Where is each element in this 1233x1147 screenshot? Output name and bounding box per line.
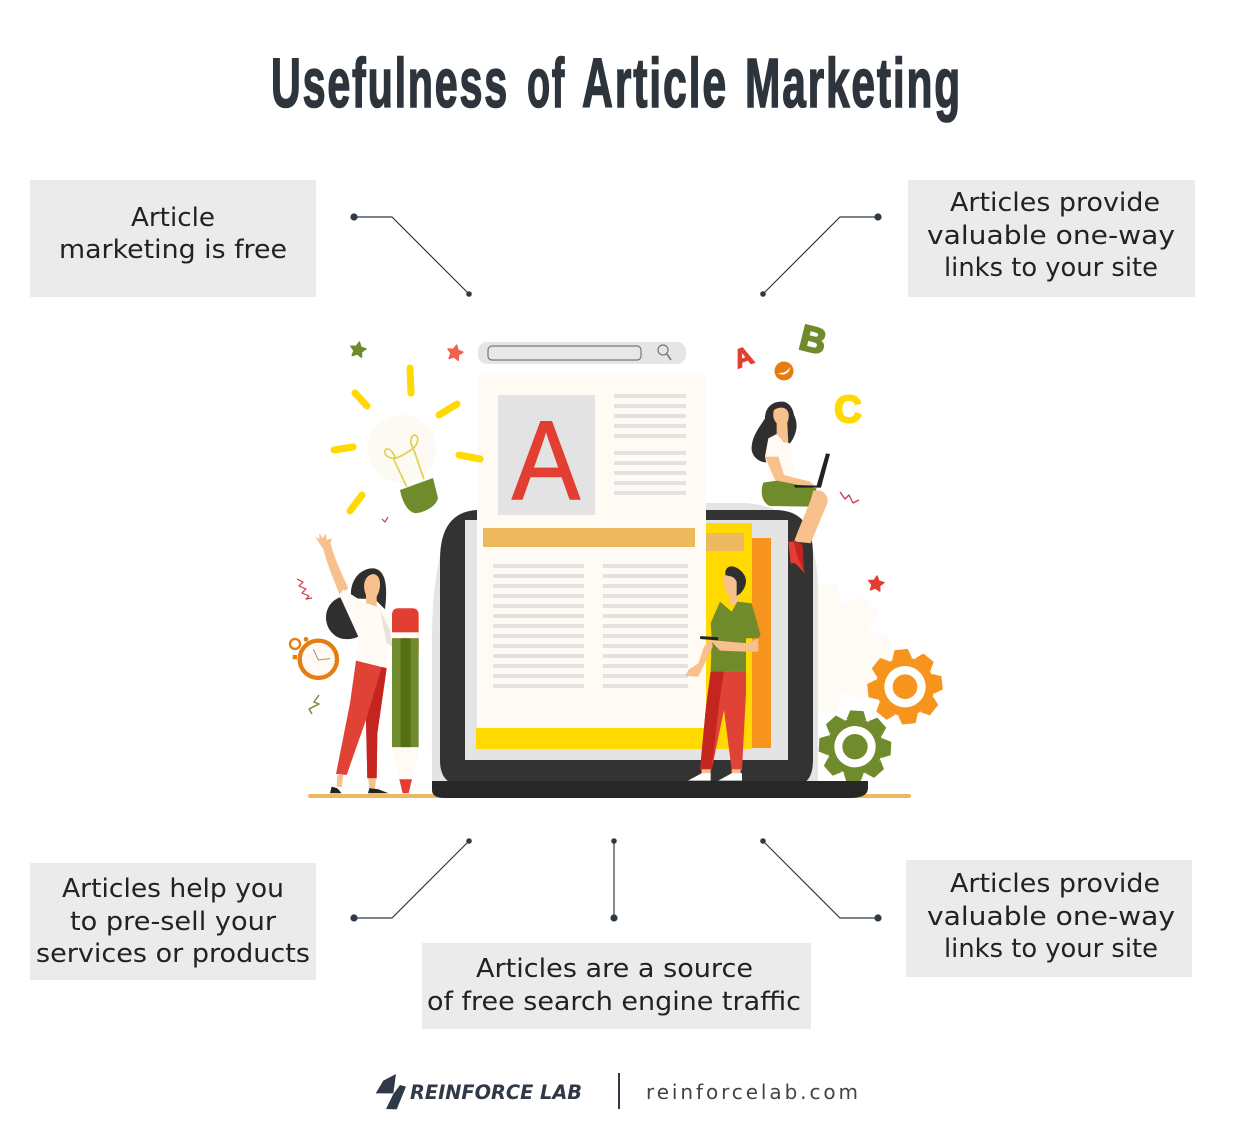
callout: one-way links bottom right xyxy=(906,860,1192,977)
callout: search engine traffic: Articles are a source xyxy=(476,954,753,984)
letters A B C: C xyxy=(834,389,862,431)
letters A B C: A xyxy=(729,340,758,374)
title: Article xyxy=(582,44,728,122)
callout: one-way links bottom right: links to your site xyxy=(944,934,1158,964)
yellow panel xyxy=(700,523,752,749)
ghost gear xyxy=(775,584,889,712)
callout: article marketing is free xyxy=(30,180,316,297)
callout: one-way links bottom right: Articles provide xyxy=(950,869,1160,899)
callout: one-way links top right: Articles provide xyxy=(950,188,1160,218)
callout: search engine traffic xyxy=(422,943,811,1029)
laptop screen xyxy=(465,520,788,760)
icon: green gear xyxy=(817,709,893,785)
orange panel xyxy=(752,538,771,748)
icon: light bulb xyxy=(334,368,480,513)
callout: search engine traffic: of free search engine traffic xyxy=(427,987,801,1017)
title: Marketing xyxy=(745,44,962,122)
callout: article marketing is free: Article xyxy=(131,203,215,233)
search bar xyxy=(478,342,686,364)
article page xyxy=(477,375,706,749)
title xyxy=(271,44,962,122)
callout: pre-sell: services or products xyxy=(36,939,310,969)
yellow footer band xyxy=(476,728,706,749)
logo icon xyxy=(376,1074,406,1109)
callout: one-way links top right: valuable one-way xyxy=(927,221,1175,251)
callout: one-way links bottom right: valuable one-way xyxy=(927,902,1175,932)
small tan bar xyxy=(700,533,744,551)
footer divider xyxy=(618,1073,620,1109)
letters A B C: B xyxy=(796,316,831,363)
woman with pencil xyxy=(315,533,393,793)
letter tile: A xyxy=(512,398,580,523)
laptop body xyxy=(440,510,813,785)
letters A B C xyxy=(729,316,862,431)
callout: one-way links top right: links to your site xyxy=(944,253,1158,283)
logo xyxy=(376,1073,858,1109)
tan heading bar xyxy=(483,528,695,547)
callout: one-way links top right xyxy=(908,180,1195,297)
stopwatch xyxy=(290,637,337,678)
laptop back shadow xyxy=(432,503,818,781)
illustration xyxy=(290,316,946,798)
icon: orange gear xyxy=(864,646,946,728)
stars and squiggles xyxy=(297,341,885,714)
callout: article marketing is free: marketing is free xyxy=(59,235,287,265)
laptop base xyxy=(432,781,868,798)
woman with laptop xyxy=(752,402,830,573)
callout: pre-sell: to pre-sell your xyxy=(70,907,276,937)
callout: pre-sell xyxy=(30,863,316,980)
floor line xyxy=(308,794,911,798)
callout: pre-sell: Articles help you xyxy=(62,874,284,904)
connector lines xyxy=(351,214,881,921)
title: Usefulness xyxy=(271,44,509,122)
man with phone xyxy=(685,566,761,781)
website url: reinforcelab.com xyxy=(646,1080,858,1104)
pencil xyxy=(392,608,419,793)
title: of xyxy=(527,44,566,122)
logo wordmark: REINFORCE LAB xyxy=(410,1081,582,1104)
page text lines xyxy=(493,394,688,688)
